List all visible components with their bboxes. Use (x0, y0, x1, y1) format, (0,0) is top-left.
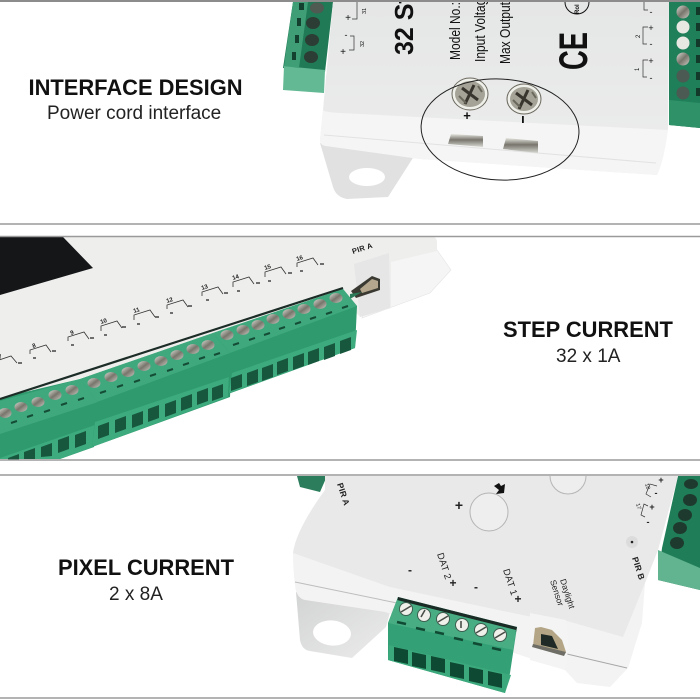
data terminal block (388, 597, 517, 693)
daylight sensor port (530, 613, 568, 670)
display (0, 237, 93, 295)
panel: step current (0, 237, 674, 460)
power terminal screws (452, 78, 541, 114)
top left green terminal (297, 476, 327, 492)
device labels: - (474, 580, 478, 594)
output labels: PIR A (351, 241, 374, 256)
left green terminal (283, 2, 333, 93)
housing labels: CE (552, 32, 596, 70)
text: 2 x 8A: 2 x 8A (109, 584, 163, 605)
photo: data terminal close-up (293, 475, 700, 693)
buttons (470, 476, 638, 548)
right green terminal (658, 476, 700, 590)
terminal slots (397, 622, 501, 650)
output labels: 11 (133, 307, 141, 315)
housing labels: - (650, 39, 652, 49)
output labels (0, 241, 374, 365)
output labels: 16 (296, 255, 305, 263)
terminal openings (394, 647, 502, 688)
housing labels: - (344, 30, 348, 40)
housing labels: 2 (636, 34, 642, 38)
device labels (335, 475, 664, 610)
device labels: Sensor (548, 579, 566, 607)
controller housing (293, 476, 678, 687)
device labels: DAT 2 (434, 552, 453, 581)
device labels: PIR A (335, 482, 352, 507)
terminal section 3 (213, 289, 357, 394)
controller housing (0, 237, 437, 402)
device labels: Daylight (558, 578, 577, 610)
output labels: 10 (100, 318, 109, 326)
arrow icon (494, 483, 505, 494)
device labels: - (646, 517, 650, 527)
output labels: 14 (232, 274, 241, 282)
terminal openings (8, 337, 351, 460)
photo: power terminal close-up (283, 0, 700, 199)
housing labels: Input Voltag (472, 0, 488, 62)
output labels: 15 (264, 264, 273, 272)
device labels: + (514, 592, 522, 606)
housing labels: - (650, 73, 652, 83)
terminal section 1 (0, 379, 98, 459)
photo: output terminal strip (0, 237, 451, 460)
lower band of housing (320, 110, 668, 175)
device labels: - (408, 563, 412, 577)
housing labels: 31 (362, 8, 368, 14)
PIR A port (350, 253, 390, 317)
device labels: + (649, 502, 655, 512)
device labels: + (658, 475, 664, 485)
output labels: 8 (32, 343, 37, 350)
output labels: 9 (70, 330, 75, 337)
output labels: 13 (201, 284, 210, 292)
housing labels: + (648, 23, 654, 33)
housing labels: - (650, 7, 652, 17)
text: 32 x 1A: 32 x 1A (556, 346, 621, 367)
green terminal strip (0, 288, 357, 460)
output labels: 12 (166, 297, 175, 305)
device labels: DAT 1 (500, 568, 519, 597)
terminal section 2 (80, 333, 232, 447)
housing labels: + (345, 13, 351, 24)
heading: pixel current: PIXEL CURRENT (58, 555, 235, 580)
device labels: PIR B (630, 556, 647, 581)
device labels: + (449, 576, 457, 590)
housing labels: Model No.: (447, 2, 463, 60)
heading: step current: STEP CURRENT (503, 317, 674, 342)
polarity marks: + (463, 108, 471, 123)
top surface of housing (293, 476, 678, 637)
panel: pixel current (58, 475, 700, 693)
mounting flap (296, 592, 392, 658)
heading: interface design: INTERFACE DESIGN (28, 75, 243, 100)
terminal screws (0, 293, 342, 418)
text: power cord interface: Power cord interface (47, 103, 221, 124)
panel: interface design (28, 0, 700, 199)
housing labels: + (340, 47, 346, 58)
controller housing (320, 2, 669, 175)
device labels: - (654, 488, 658, 498)
terminal screws (400, 602, 506, 642)
callout ellipse (418, 75, 582, 184)
terminal slots (11, 306, 348, 423)
housing labels: 32 (360, 41, 366, 47)
housing labels: Max Output (497, 2, 513, 64)
housing labels (340, 0, 654, 83)
device labels: 18 (643, 483, 651, 490)
power slots (448, 134, 538, 153)
right green terminal (669, 2, 700, 128)
polarity marks (463, 108, 524, 123)
housing labels: 1 (635, 67, 641, 71)
mounting flap (320, 143, 418, 199)
device labels: 17 (634, 503, 642, 510)
end tab (362, 250, 451, 318)
housing labels: + (648, 56, 654, 66)
housing labels: Rol (575, 4, 581, 14)
device labels: + (455, 497, 463, 513)
